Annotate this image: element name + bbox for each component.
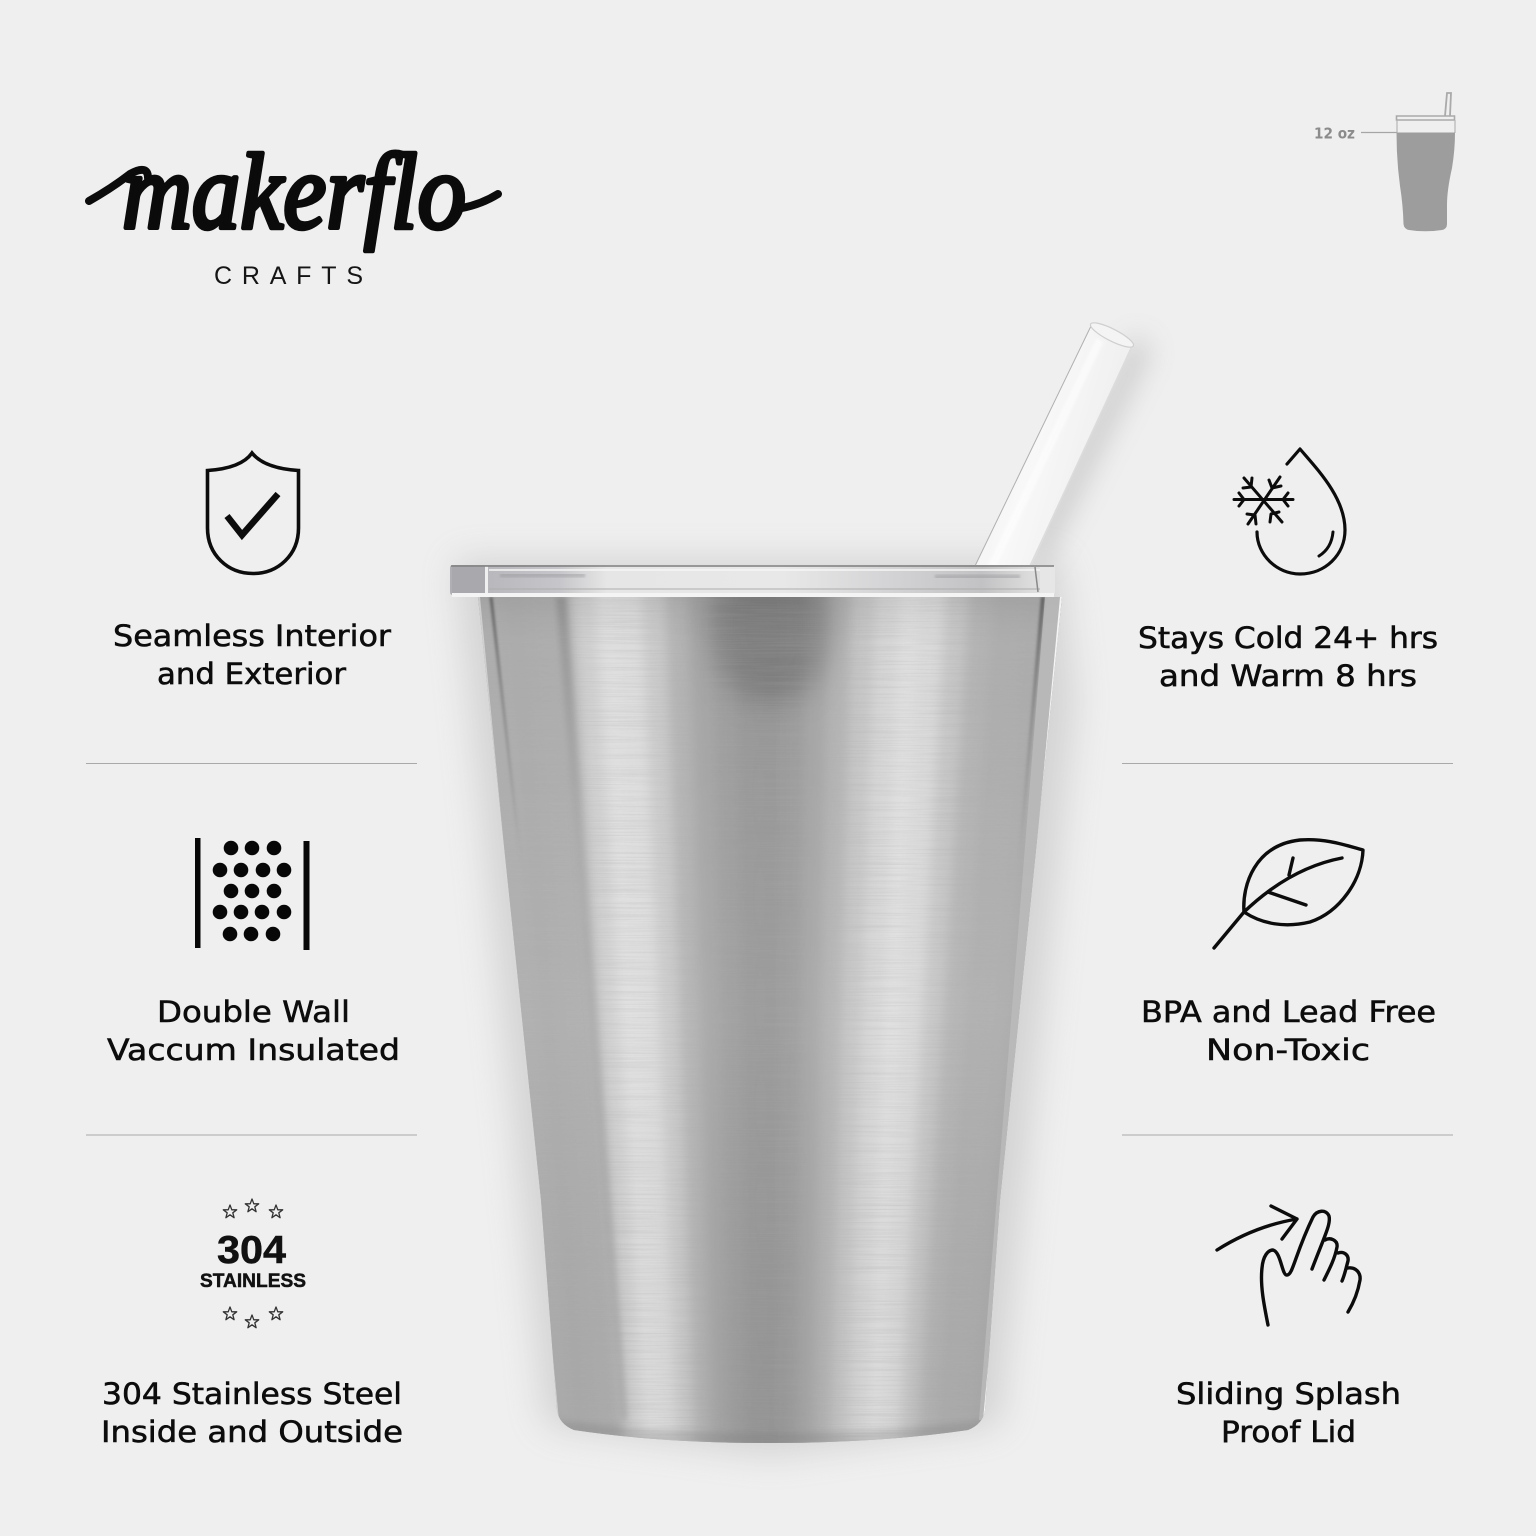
top center dark patch	[700, 597, 841, 709]
logo: makerflo crafts	[89, 133, 498, 290]
logo: makerflo crafts: CRAFTS	[214, 262, 363, 290]
icon: shield with check	[208, 453, 298, 574]
divider left 2	[86, 1134, 417, 1136]
text: bpa and lead free: Non-Toxic	[1206, 1033, 1370, 1067]
logo: makerflo crafts: makerflo	[122, 133, 466, 252]
icon: swipe hand	[1217, 1206, 1360, 1325]
text: bpa and lead free	[1141, 995, 1436, 1067]
size indicator: 12 oz mini tumbler: 12 oz	[1314, 124, 1355, 142]
text: double wall vaccum insulated	[107, 995, 400, 1067]
size indicator: 12 oz mini tumbler	[1314, 93, 1455, 231]
icon: leaf	[1214, 840, 1363, 948]
divider right 1	[1122, 762, 1453, 764]
text: sliding splash proof lid	[1176, 1377, 1401, 1449]
tumbler shadow	[455, 335, 1150, 1455]
icon: 304 stainless badge: 304	[217, 1229, 286, 1272]
tumbler product photo	[440, 319, 1150, 1455]
brushed texture	[591, 606, 940, 1426]
text: double wall vaccum insulated: Vaccum Insulated	[107, 1033, 400, 1067]
text: double wall vaccum insulated: Double Wall	[157, 995, 350, 1029]
text: 304 stainless steel: 304 Stainless Steel	[102, 1377, 402, 1411]
divider left 1	[86, 762, 417, 764]
lid	[450, 565, 1055, 595]
text: 304 stainless steel	[101, 1377, 403, 1449]
bottom rim shading	[562, 1421, 979, 1442]
text: stays cold and warm	[1138, 621, 1438, 693]
left dark seam	[488, 597, 514, 802]
text: bpa and lead free: BPA and Lead Free	[1141, 995, 1436, 1029]
icon: snowflake and drop	[1234, 449, 1345, 574]
tumbler body	[478, 597, 1062, 1443]
right light edge	[979, 597, 1062, 1420]
text: 304 stainless steel: Inside and Outside	[101, 1415, 403, 1449]
icon: 304 stainless badge: STAINLESS	[200, 1270, 306, 1292]
text: seamless interior and exterior: Seamless Interior	[113, 619, 391, 653]
band step edge left	[556, 597, 628, 1420]
text: stays cold and warm: and Warm 8 hrs	[1159, 659, 1417, 693]
text: stays cold and warm: Stays Cold 24+ hrs	[1138, 621, 1438, 655]
text: seamless interior and exterior: and Exterior	[157, 657, 346, 691]
icon: double wall dots	[195, 838, 310, 950]
text: seamless interior and exterior	[113, 619, 391, 691]
divider right 2	[1122, 1134, 1453, 1136]
straw	[975, 319, 1136, 568]
text: sliding splash proof lid: Proof Lid	[1221, 1415, 1356, 1449]
text: sliding splash proof lid: Sliding Splash	[1176, 1377, 1401, 1411]
right dark seam	[1024, 597, 1045, 800]
icon: 304 stainless badge	[200, 1199, 306, 1328]
